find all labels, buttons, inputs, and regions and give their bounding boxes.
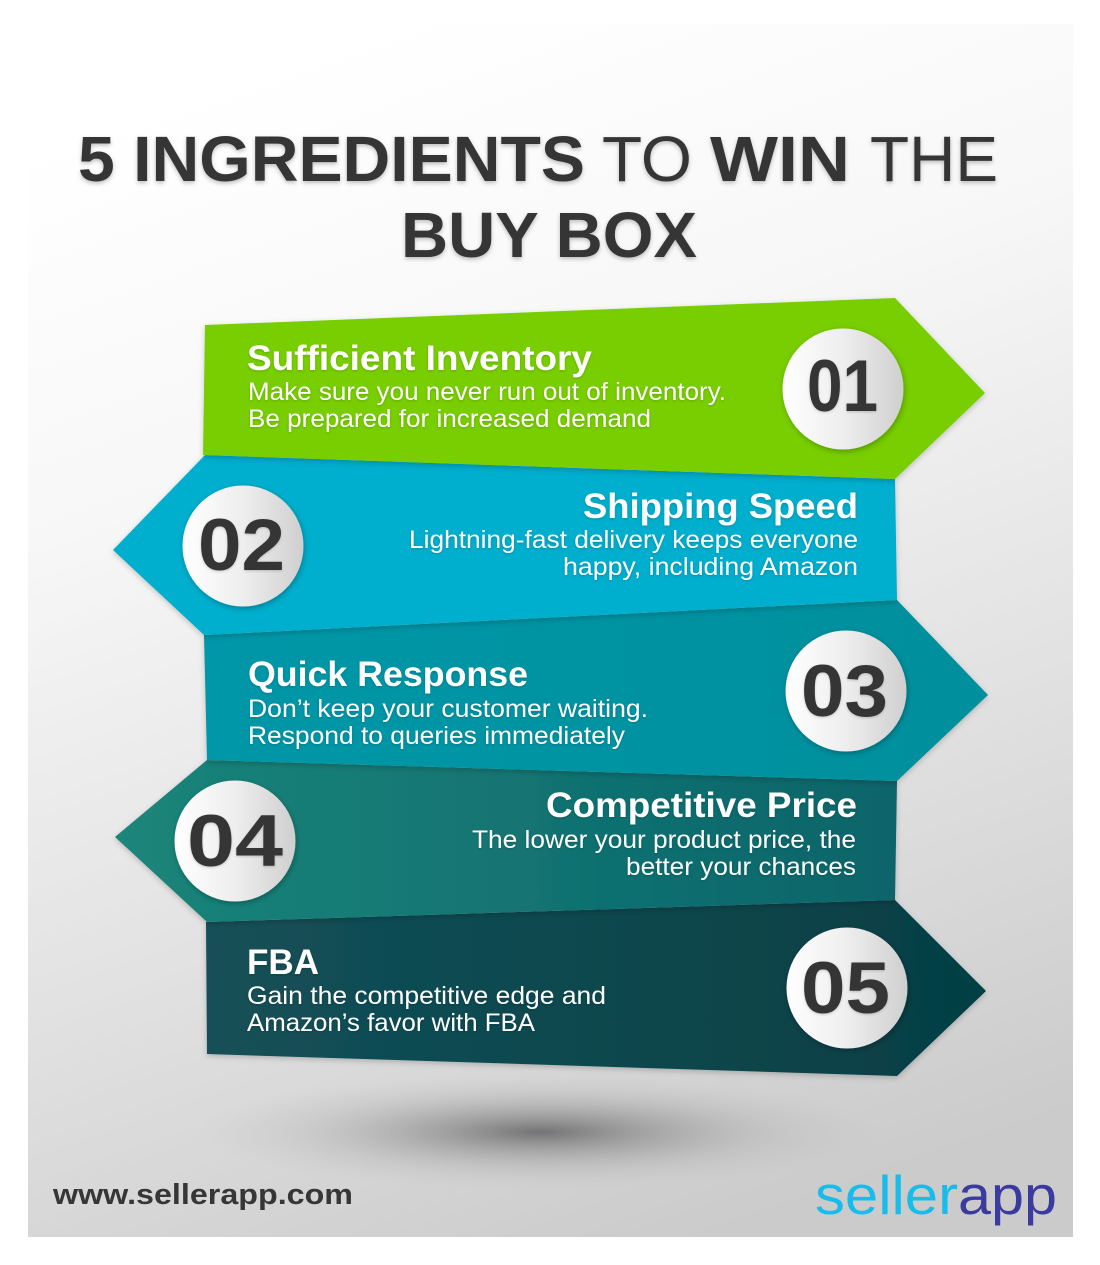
arrow 2: Shipping Speed <box>113 455 897 635</box>
description: Competitive Price <box>472 826 856 881</box>
number badge 03: 03 <box>801 651 888 732</box>
description: Sufficient Inventory: Make sure you never run out of inventory. <box>248 378 726 406</box>
heading: Sufficient Inventory: Sufficient Inventory <box>247 339 593 378</box>
description: Quick Response <box>248 695 648 750</box>
description: Competitive Price: better your chances <box>626 853 856 881</box>
description: Sufficient Inventory: Be prepared for increased demand <box>248 405 651 433</box>
description: Competitive Price: The lower your product price, the <box>472 826 856 854</box>
description: Shipping Speed <box>409 526 858 581</box>
description: FBA: Amazon’s favor with FBA <box>247 1009 535 1037</box>
description: Shipping Speed: happy, including Amazon <box>563 553 858 581</box>
logo: sellerapp: seller <box>815 1164 958 1226</box>
number badge 02 <box>182 486 304 606</box>
number badge 01 <box>782 328 904 450</box>
heading: Quick Response: Quick Response <box>248 655 528 694</box>
title: 5 INGREDIENTS <box>78 123 585 195</box>
number badge 04: 04 <box>187 801 283 882</box>
title: TO <box>602 123 692 195</box>
arrow 1: Sufficient Inventory <box>203 298 985 479</box>
title: BUY BOX <box>401 199 697 271</box>
logo: sellerapp: app <box>958 1164 1057 1226</box>
description: Shipping Speed: Lightning-fast delivery keeps everyone <box>409 526 858 554</box>
number badge 05: 05 <box>801 948 890 1029</box>
title: THE <box>870 123 998 195</box>
number badge 02: 02 <box>198 505 285 586</box>
description: FBA <box>247 982 606 1037</box>
logo: sellerapp <box>815 1164 1057 1226</box>
description: Sufficient Inventory <box>248 378 726 433</box>
description: Quick Response: Don’t keep your customer waiting. <box>248 695 648 723</box>
arrow 4: Competitive Price <box>115 760 897 922</box>
title: WIN <box>710 123 850 195</box>
arrow 3: Quick Response <box>204 600 988 781</box>
floor shadow <box>195 1074 885 1190</box>
number badge 05 <box>786 928 908 1048</box>
heading: FBA: FBA <box>247 943 319 982</box>
arrow 5: FBA <box>206 900 986 1076</box>
description: Quick Response: Respond to queries immediately <box>248 722 626 750</box>
website url: www.sellerapp.com <box>52 1179 353 1211</box>
number badge 03 <box>786 630 906 752</box>
number badge 04 <box>174 780 296 902</box>
number badge 01: 01 <box>807 346 878 427</box>
title <box>78 123 998 271</box>
heading: Shipping Speed: Shipping Speed <box>583 487 858 526</box>
description: FBA: Gain the competitive edge and <box>247 982 606 1010</box>
heading: Competitive Price: Competitive Price <box>546 786 857 825</box>
